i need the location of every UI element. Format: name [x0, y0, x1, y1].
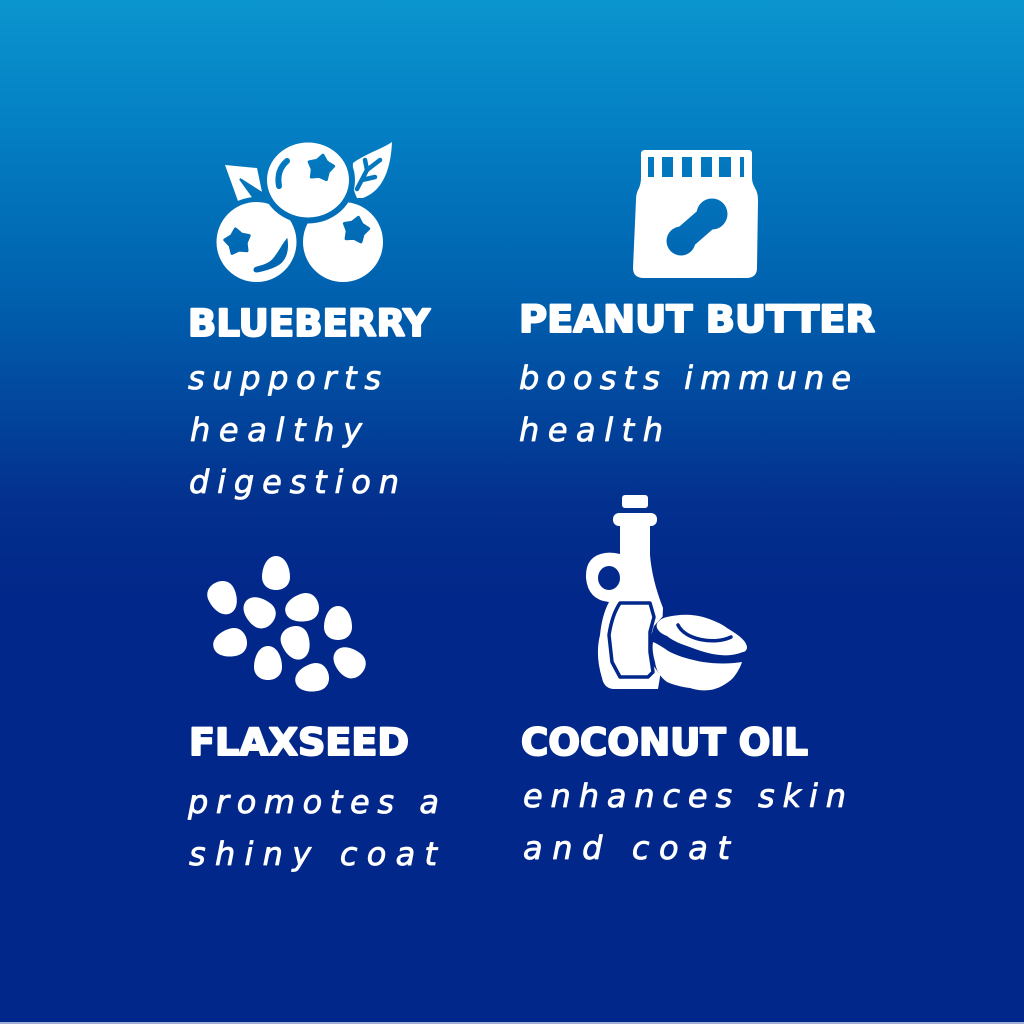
text: coconut oil benefit: [523, 777, 846, 867]
panel: flaxseed: [187, 556, 439, 873]
text: coconut oil benefit: and coat: [523, 829, 731, 867]
panel: blueberry: [188, 142, 431, 501]
icon: flax seeds: [203, 556, 371, 696]
icon: peanut butter jar: [633, 150, 758, 278]
icon: oil bottle and coconut: [586, 495, 747, 690]
heading: peanut butter: PEANUT BUTTER: [519, 298, 875, 341]
text: flaxseed benefit: shiny coat: [189, 835, 438, 873]
text: blueberry benefit: supports: [188, 359, 381, 397]
text: blueberry benefit: [188, 359, 399, 501]
heading: coconut oil: COCONUT OIL: [521, 721, 808, 764]
heading: blueberry: BLUEBERRY: [188, 302, 431, 345]
text: peanut butter benefit: boosts immune: [519, 359, 851, 397]
text: peanut butter benefit: health: [519, 411, 663, 449]
text: coconut oil benefit: enhances skin: [523, 777, 846, 815]
text: flaxseed benefit: [187, 783, 439, 873]
icon: blueberries: [216, 142, 392, 282]
panel: peanut butter: [519, 150, 875, 449]
text: blueberry benefit: healthy: [190, 411, 363, 449]
text: flaxseed benefit: promotes a: [187, 783, 439, 821]
heading: flaxseed: FLAXSEED: [189, 721, 409, 764]
panel: coconut oil: [521, 495, 846, 867]
text: peanut butter benefit: [519, 359, 851, 449]
text: blueberry benefit: digestion: [189, 463, 399, 501]
